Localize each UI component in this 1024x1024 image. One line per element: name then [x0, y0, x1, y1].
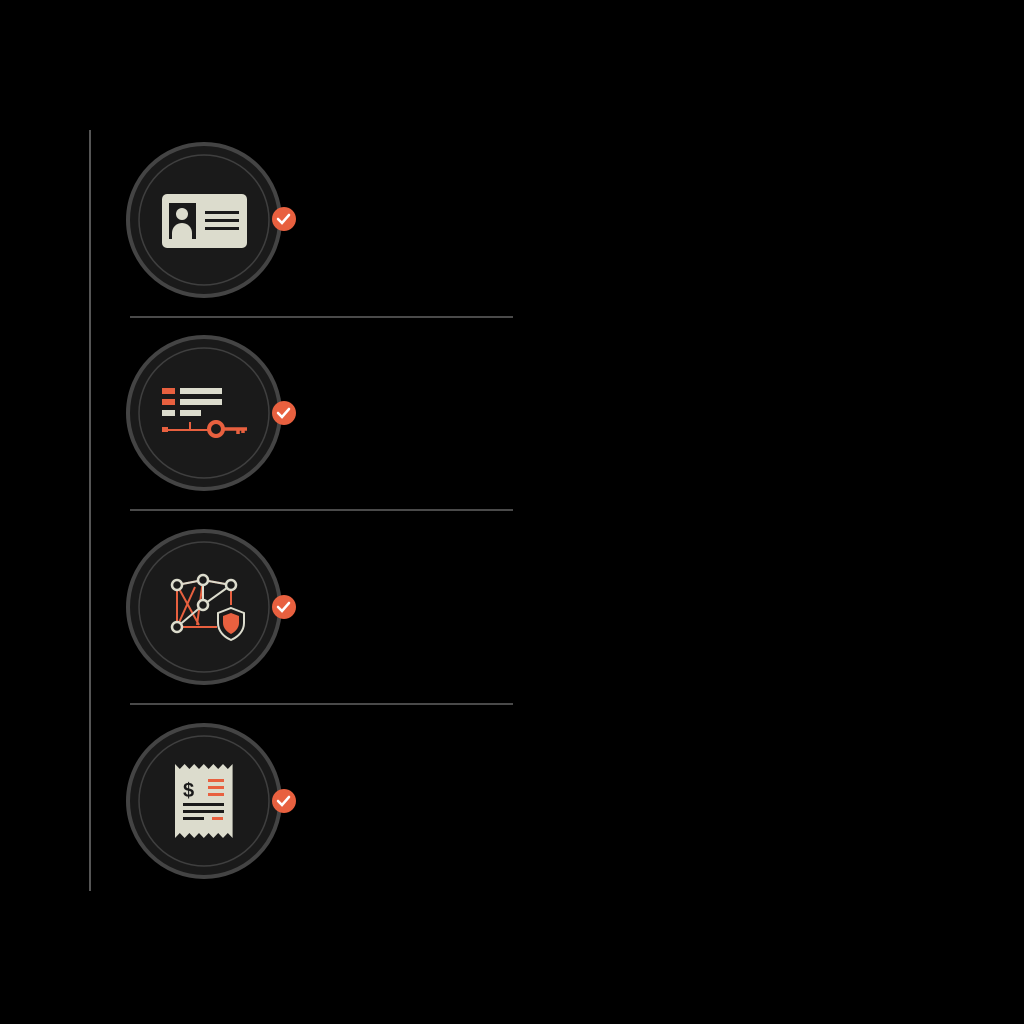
step 2: data key icon [128, 337, 296, 489]
step 4: receipt icon: $ [183, 780, 194, 802]
step 3: network shield icon [128, 531, 296, 683]
step 4: receipt icon [128, 725, 296, 877]
step 1: ID card icon [128, 144, 296, 296]
